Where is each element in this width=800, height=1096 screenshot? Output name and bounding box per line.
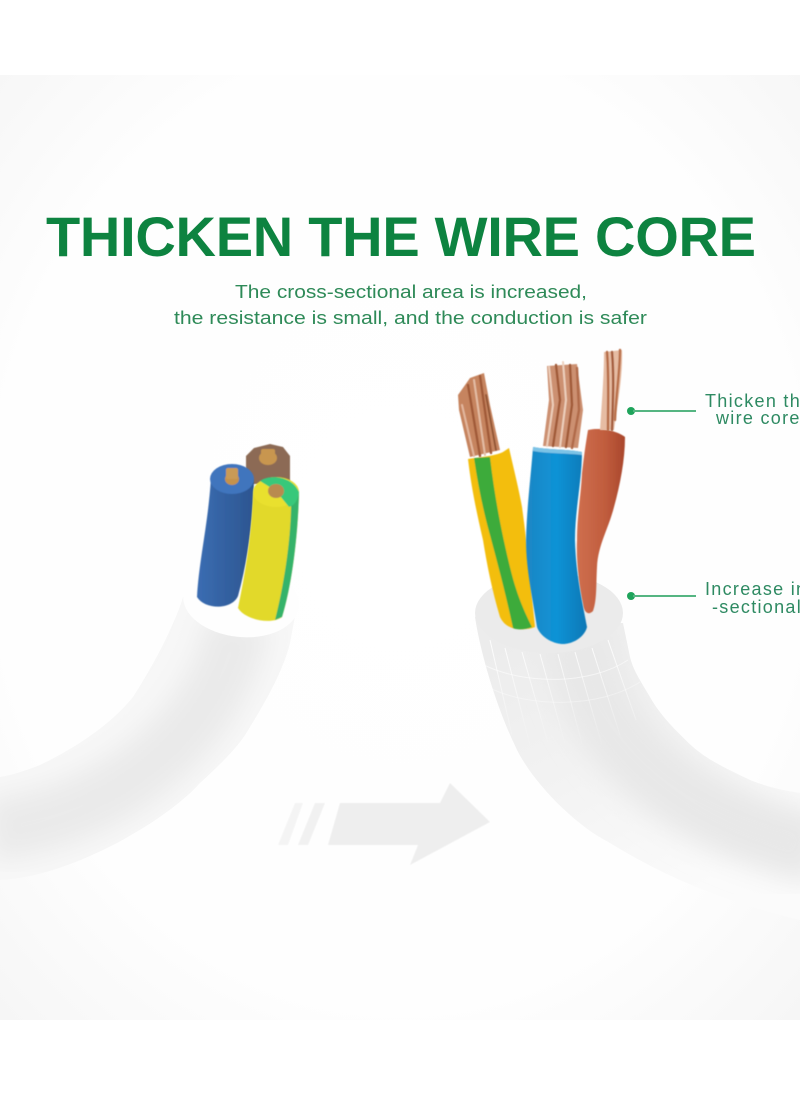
- right thick cable: [458, 350, 800, 930]
- subtitle: The cross-sectional area is increased,: [235, 282, 587, 302]
- cable sheath right: [475, 617, 800, 878]
- blue wire: [197, 464, 254, 607]
- yellow and green wire: [238, 477, 299, 621]
- callout: thicken the wire core: wire core: [715, 408, 800, 428]
- blue wire right: [526, 447, 587, 644]
- cable mesh: [486, 640, 628, 705]
- red wire: [577, 429, 625, 613]
- decorative arrow: [278, 783, 490, 865]
- brown wire: [246, 444, 290, 484]
- cable end face right: [475, 573, 623, 653]
- middle wire strands: [543, 362, 583, 448]
- callout: increase in cross-sectional area: [627, 579, 800, 617]
- bottom margin: [0, 1020, 800, 1096]
- subtitle: [174, 282, 647, 328]
- left wire strands: [458, 373, 500, 457]
- subtitle: the resistance is small, and the conduction is safer: [174, 308, 647, 328]
- red wire strands: [600, 350, 622, 430]
- title: THICKEN THE WIRE CORE: [46, 205, 756, 268]
- yellow and green wire right: [468, 448, 535, 629]
- callout: thicken the wire core: [627, 391, 800, 428]
- left thin cable: [0, 444, 310, 890]
- infographic: thicken the wire core: [0, 217, 800, 1020]
- cable sheath left: [0, 599, 288, 864]
- cable end face left: [180, 559, 302, 643]
